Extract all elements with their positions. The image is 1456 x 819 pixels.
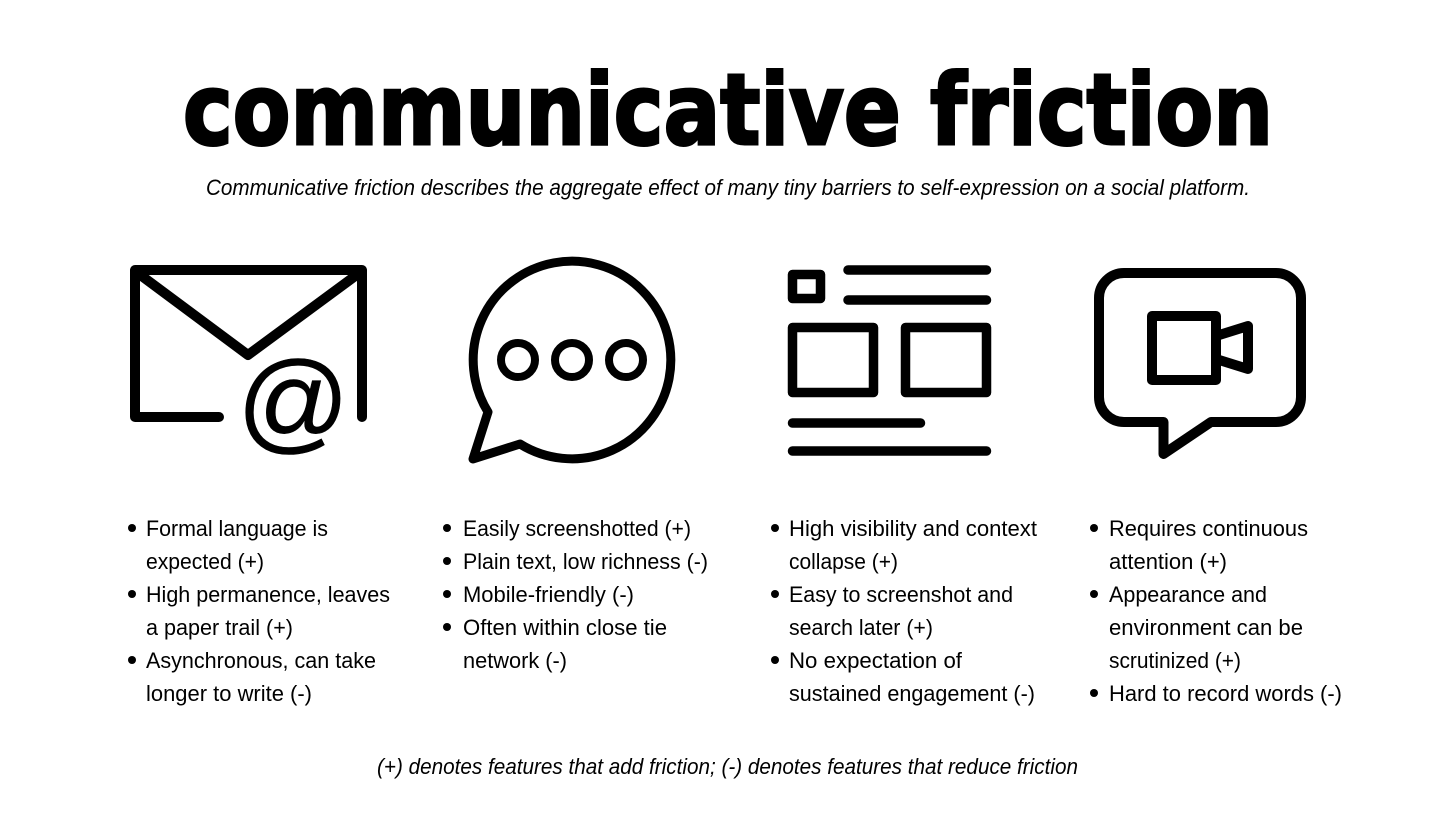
column: video bullets: Requires continuous	[1109, 516, 1308, 541]
column: chat bullets: Mobile-friendly (-)	[463, 582, 634, 607]
column: email bullets: expected (+)	[146, 549, 264, 574]
column: email bullets: High permanence, leaves	[146, 582, 390, 607]
column: news bullets: No expectation of	[789, 648, 963, 673]
column: news bullets: collapse (+)	[789, 549, 898, 574]
column: video bullets: environment can be	[1109, 615, 1303, 640]
column: chat bullets	[443, 516, 708, 673]
subtitle: Communicative friction describes the aggregate effect of many tiny barriers to self-expression on a social platform.	[206, 175, 1250, 200]
column: news bullets: sustained engagement (-)	[789, 681, 1035, 706]
column: news bullets	[771, 516, 1037, 706]
column: video bullets: Appearance and	[1109, 582, 1267, 607]
column: video bullets: attention (+)	[1109, 549, 1227, 574]
column: email bullets: longer to write (-)	[146, 681, 312, 706]
icon: news layout	[792, 270, 986, 451]
column: video bullets: scrutinized (+)	[1109, 648, 1241, 673]
column: email bullets: a paper trail (+)	[146, 615, 293, 640]
column: chat bullets: Plain text, low richness (-)	[463, 549, 708, 574]
column: news bullets: search later (+)	[789, 615, 933, 640]
column: email bullets: Asynchronous, can take	[146, 648, 376, 673]
column: video bullets	[1090, 516, 1342, 706]
footnote: (+) denotes features that add friction; (-) denotes features that reduce friction	[377, 754, 1078, 779]
column: chat bullets: Often within close tie	[463, 615, 667, 640]
column: chat bullets: network (-)	[463, 648, 567, 673]
icon: email envelope	[135, 270, 362, 463]
title: communicative friction	[183, 54, 1273, 168]
column: video bullets: Hard to record words (-)	[1109, 681, 1342, 706]
icon: video chat	[1099, 273, 1301, 454]
column: news bullets: Easy to screenshot and	[789, 582, 1013, 607]
column: chat bullets: Easily screenshotted (+)	[463, 516, 691, 541]
column: email bullets: Formal language is	[146, 516, 328, 541]
icon: chat bubble	[473, 261, 671, 459]
column: news bullets: High visibility and context	[789, 516, 1037, 541]
icon: email envelope: @	[237, 339, 350, 463]
column: email bullets	[128, 516, 390, 706]
